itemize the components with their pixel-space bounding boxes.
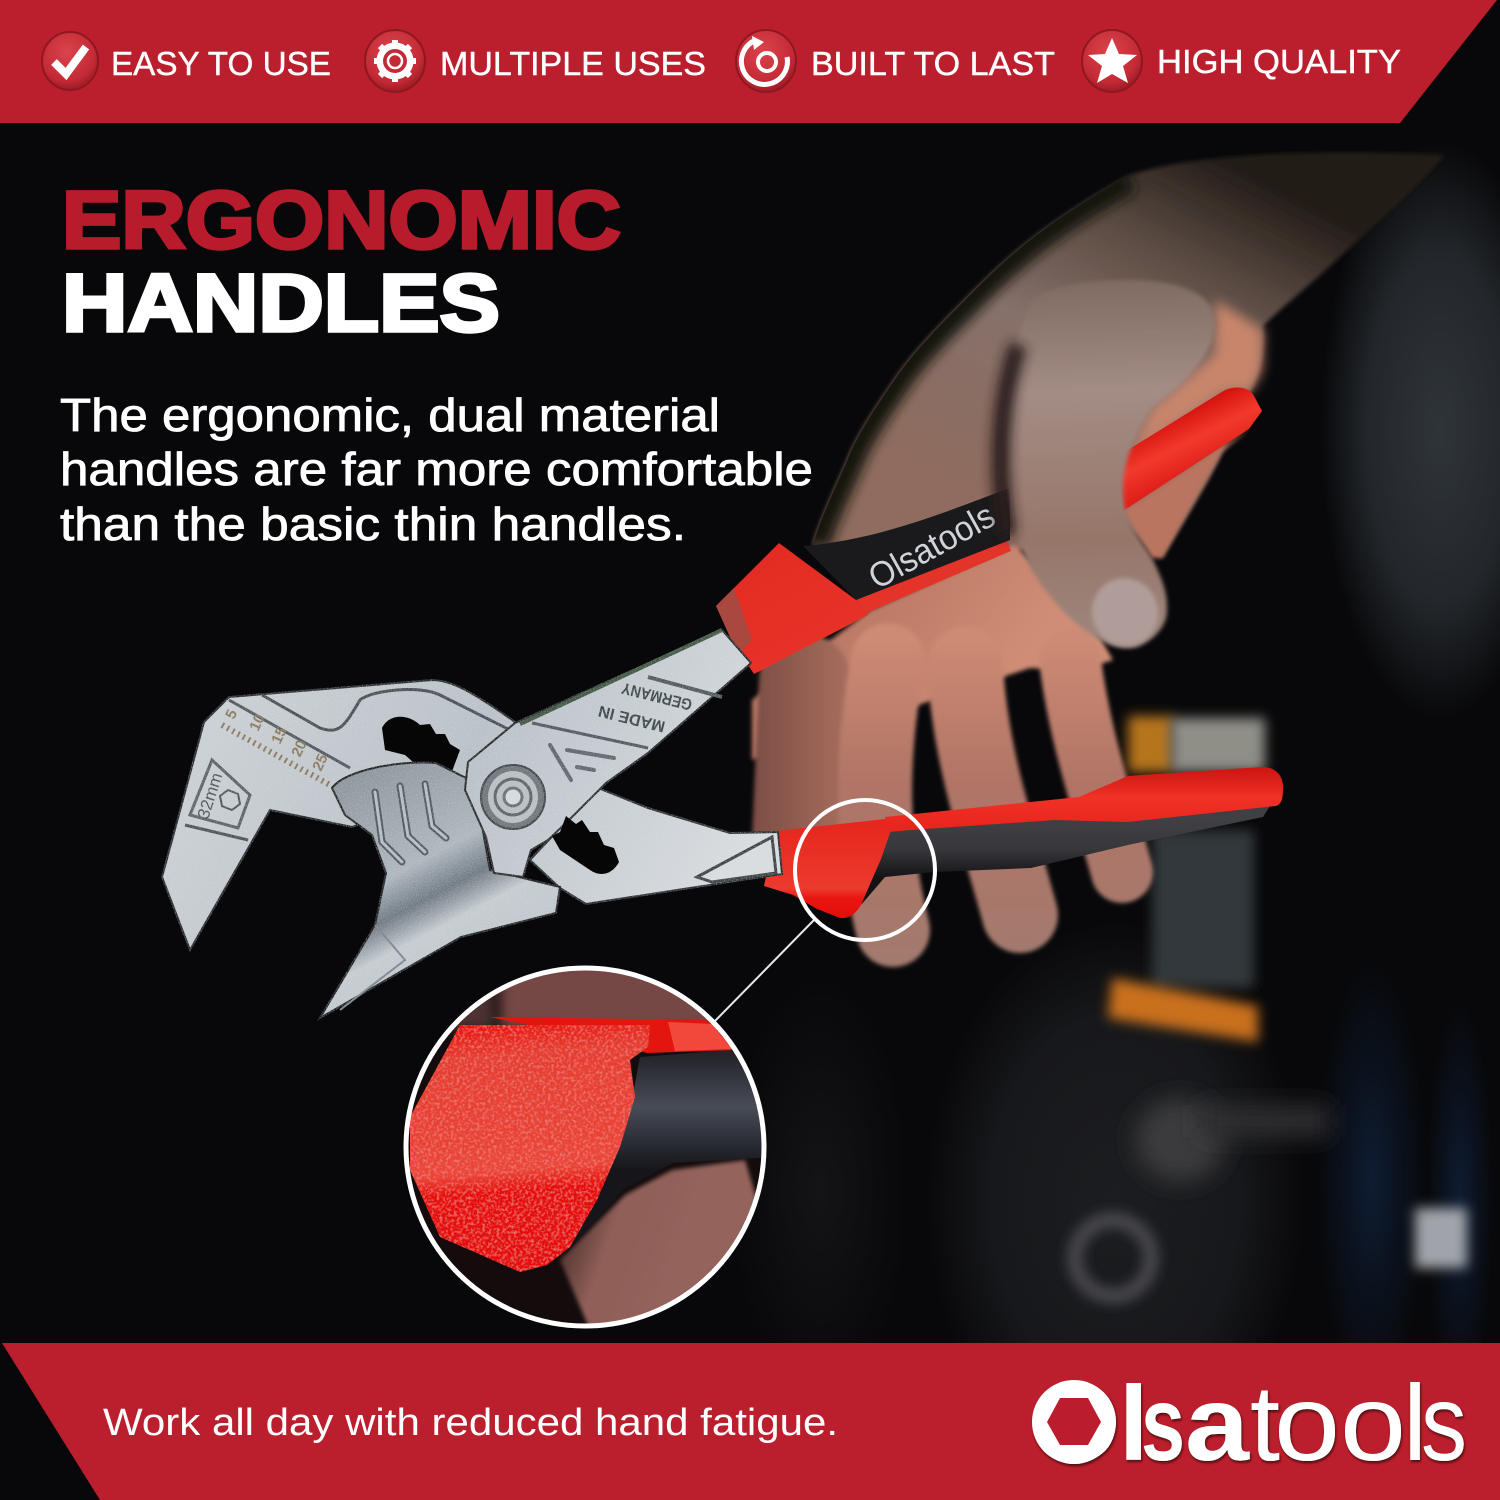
inset red strip (490, 1017, 735, 1053)
upper tooth hole (382, 717, 460, 790)
logo: Olsatools: s (1141, 1365, 1185, 1483)
logo: Olsatools: t (1250, 1362, 1280, 1483)
logo: Olsatools (1032, 1362, 1467, 1483)
ruler scale (222, 707, 332, 774)
inset base (408, 1033, 760, 1324)
logo: Olsatools: s (1421, 1362, 1467, 1483)
body copy: The ergonomic, dual material (60, 389, 720, 441)
logo: Olsatools: a (1185, 1365, 1250, 1483)
body copy: than the basic thin handles. (60, 498, 686, 550)
label: high quality: HIGH QUALITY (1157, 43, 1401, 80)
inset black grip (565, 1050, 775, 1255)
thumb (1001, 280, 1215, 655)
logo: Olsatools: O (1036, 1362, 1120, 1483)
small callout circle (795, 800, 935, 940)
tagline: Work all day with reduced hand fatigue. (103, 1402, 838, 1444)
thumb left shadow (1001, 345, 1018, 535)
logo: Olsatools: l (1119, 1365, 1148, 1483)
body copy: handles are far more comfortable (60, 443, 813, 495)
upper arm and pivot plate (465, 630, 751, 877)
top banner (0, 0, 1497, 123)
pivot bolt (481, 765, 545, 829)
fingers (798, 660, 1122, 930)
magnified inset of handle (400, 960, 775, 1330)
icon: gear badge (365, 30, 425, 92)
ruler scale: 15 (268, 724, 291, 747)
inset red bolster (410, 1025, 650, 1272)
logo: Olsatools: o (1340, 1362, 1406, 1483)
ruler scale: 20 (288, 737, 311, 760)
ruler scale: 5 (222, 707, 241, 722)
lower bolster (764, 819, 892, 918)
label: easy to use: EASY TO USE (111, 45, 331, 82)
headline (62, 175, 621, 349)
movable jaw (320, 762, 560, 1018)
warm palm edge (1130, 300, 1263, 455)
palm under handle (752, 545, 1113, 760)
headline second line: HANDLES (62, 258, 500, 349)
ruler scale: 10 (246, 711, 269, 734)
ruler scale: 25 (309, 751, 332, 774)
front metal jaw and plate (320, 630, 751, 1018)
lower handle grip (861, 806, 1270, 905)
thumb nail (1083, 569, 1167, 655)
label: multiple uses: MULTIPLE USES (440, 45, 706, 82)
headline first line: ERGONOMIC (62, 175, 621, 266)
label: built to last: BUILT TO LAST (811, 45, 1055, 82)
upper bolster (716, 543, 868, 674)
body copy (60, 389, 813, 550)
inset ring (406, 968, 764, 1326)
callout connector line (714, 920, 814, 1022)
upper handle (716, 388, 1262, 674)
logo: Olsatools: o (1274, 1362, 1340, 1483)
back of hand and wrist (813, 152, 1445, 600)
logo: Olsatools: l (1403, 1362, 1427, 1483)
bottom banner (2, 1343, 1500, 1500)
upper handle red strip (1118, 388, 1262, 511)
hand (752, 152, 1445, 930)
lower handle red strip (885, 767, 1283, 832)
brand on grip: Olsatools (862, 496, 1002, 597)
upper arm and pivot plate: MADE IN (597, 702, 667, 735)
upper handle black grip (803, 488, 1010, 600)
fixed jaw with ruler (162, 680, 515, 950)
rear metal arm and fixed jaw (162, 680, 782, 950)
stamped origin text: GERMANY (620, 679, 694, 713)
inset skin lower (560, 1160, 770, 1330)
icon: renewal badge (736, 30, 796, 92)
icon: check badge (42, 32, 98, 90)
lower handle (764, 767, 1283, 918)
lower right arm (530, 788, 782, 904)
lower tooth hole (552, 816, 619, 874)
icon: star badge (1082, 30, 1142, 92)
tool: pliers wrench (162, 388, 1283, 1018)
hand left edge falloff (813, 176, 1128, 545)
size mark: 32mm (194, 770, 226, 821)
inset skin upper (494, 970, 722, 1036)
